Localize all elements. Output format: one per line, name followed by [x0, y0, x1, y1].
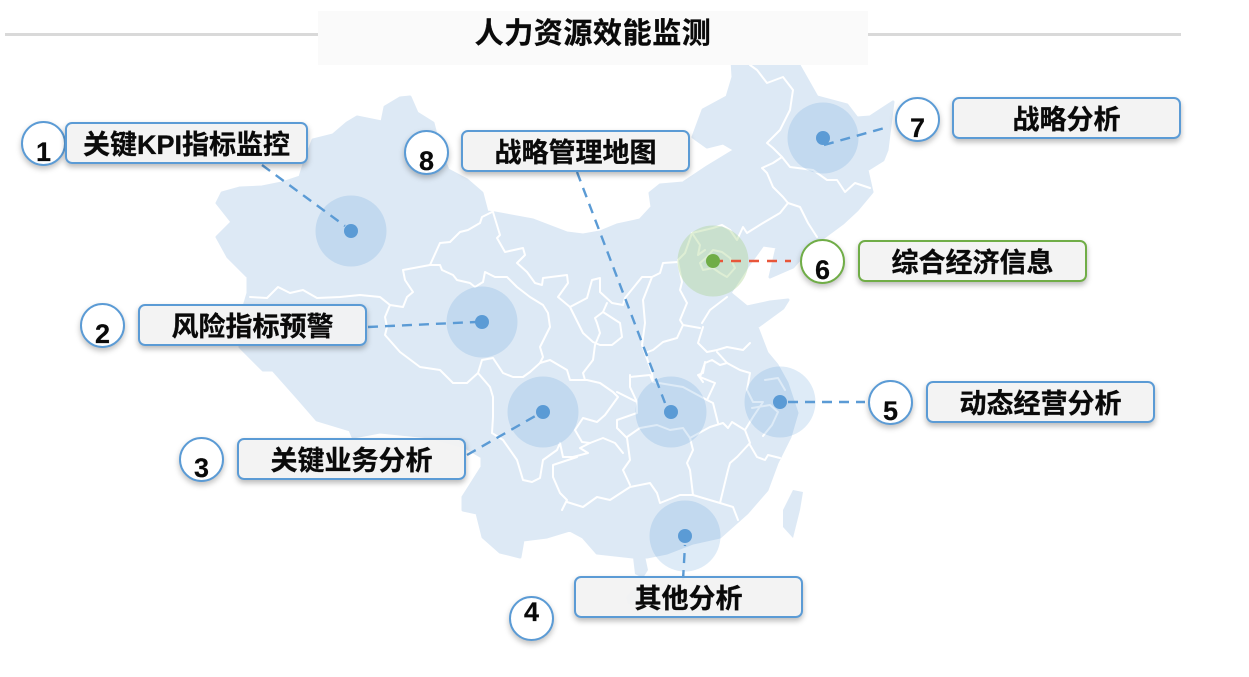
badge 6 — [800, 239, 845, 284]
badge 4: 4 — [524, 597, 539, 627]
label 2: 风险指标预警 — [172, 312, 334, 342]
badge 4 — [509, 596, 554, 641]
title — [318, 11, 868, 65]
label 4 — [574, 576, 803, 618]
badge 3: 3 — [194, 453, 209, 483]
label 4: 其他分析 — [634, 584, 742, 614]
label 1 — [65, 122, 308, 164]
badge 2 — [80, 303, 125, 348]
label 7 — [952, 97, 1181, 139]
label 3 — [237, 438, 466, 480]
label 2 — [138, 304, 367, 346]
label 5: 动态经营分析 — [960, 389, 1122, 419]
badge 3 — [179, 437, 224, 482]
label 8: 战略管理地图 — [494, 138, 656, 168]
badge 2: 2 — [95, 319, 110, 349]
header rule — [5, 33, 1181, 36]
dashed connector: red — [713, 260, 791, 262]
badge 5: 5 — [883, 396, 898, 426]
map: mainland outline — [217, 60, 893, 557]
label 3: 关键业务分析 — [270, 446, 432, 476]
title: 人力资源效能监测 — [475, 18, 711, 50]
badge 6: 6 — [815, 255, 830, 285]
label 6 — [858, 240, 1087, 282]
label 6: 综合经济信息 — [892, 248, 1054, 278]
badge 7 — [895, 97, 940, 142]
badge 1 — [21, 121, 66, 166]
badge 7: 7 — [910, 113, 925, 143]
label 8 — [461, 130, 690, 172]
label 5 — [926, 381, 1155, 423]
marker dots — [344, 131, 830, 543]
label 1: 关键KPI指标监控 — [83, 130, 290, 160]
marker halos — [316, 102, 858, 572]
label 7: 战略分析 — [1012, 105, 1120, 135]
marker dot: green — [706, 254, 720, 268]
map: Taiwan — [783, 490, 803, 538]
dashed connectors — [262, 127, 888, 580]
badge 5 — [868, 380, 913, 425]
badge 8 — [404, 130, 449, 175]
badge 1: 1 — [36, 137, 51, 167]
map: Hainan — [626, 586, 650, 606]
map: province borders — [250, 65, 870, 520]
map: Leizhou peninsula — [633, 556, 648, 578]
badge 8: 8 — [419, 146, 434, 176]
